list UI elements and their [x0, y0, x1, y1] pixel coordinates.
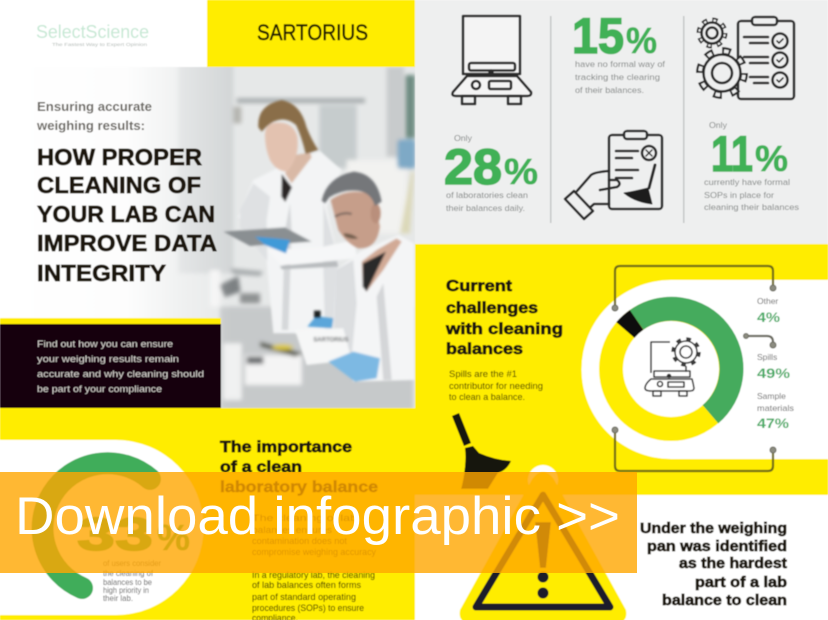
title: HOW PROPER	[37, 144, 202, 170]
legend: sample materials: Sample	[757, 391, 786, 401]
title	[37, 144, 217, 286]
body text: to clean a balance.	[449, 392, 525, 402]
callout text: part of a lab	[695, 575, 787, 591]
stat: 15 percent: %	[626, 20, 657, 61]
stat: percentage: %	[157, 517, 190, 558]
panel: logo header	[0, 0, 415, 67]
callout: compliance box: be part of your compliance	[37, 384, 162, 394]
callout text: balance to clean	[662, 593, 787, 609]
heading: challenges	[446, 300, 538, 317]
stat caption: their lab.	[103, 594, 133, 603]
body text: compromise weighing accuracy	[252, 547, 376, 557]
stat caption: high priority in	[103, 586, 149, 595]
title: YOUR LAB CAN	[37, 201, 215, 227]
heading	[445, 278, 563, 358]
photo: man scientist: SARTORIUS	[313, 338, 348, 344]
stat: 11 percent: 11	[711, 126, 753, 182]
body text: In a regulatory lab, the cleaning	[252, 570, 375, 580]
body text: part of standard operating	[252, 592, 356, 602]
stat: 28 percent: %	[504, 151, 538, 192]
callout text	[640, 521, 787, 609]
intro text	[36, 99, 152, 133]
body text: The cleaning of lab	[252, 513, 357, 523]
body text: of lab balances often forms	[252, 580, 361, 590]
photo: man scientist	[295, 172, 415, 382]
stat: 11 percent: SOPs in place for	[704, 190, 774, 200]
icon: hand with cleaning checklist	[565, 131, 662, 219]
photo: woman scientist	[223, 100, 357, 333]
callout text: pan was identified	[647, 539, 787, 555]
body text: balances ensures	[252, 525, 332, 535]
banner: download infographic: Download infographic >>	[15, 487, 620, 546]
stat: 28 percent: 28	[444, 139, 502, 195]
photo: lab background	[178, 63, 416, 410]
legend: sample materials	[757, 391, 794, 431]
logo: SelectScience: SelectScience	[36, 22, 149, 42]
stat: 15 percent: of their balances.	[575, 85, 644, 95]
white pill	[582, 280, 828, 459]
icon: balance with gear	[645, 340, 698, 396]
legend: sample materials: materials	[757, 403, 794, 413]
icon part: small gear	[700, 20, 724, 46]
panel: lab photo	[55, 66, 416, 409]
callout text: Under the weighing	[640, 521, 787, 537]
title: IMPROVE DATA	[37, 230, 217, 256]
legend: other: 4%	[757, 310, 780, 325]
icon part: gear	[674, 340, 698, 364]
legend: spills: Spills	[757, 352, 777, 362]
icon: warning triangle	[460, 465, 626, 620]
stat: 15 percent: tracking the clearing	[575, 72, 660, 82]
icon: gears and checklist	[700, 17, 794, 99]
heading: The importance	[220, 439, 352, 456]
body text	[449, 369, 543, 402]
callout: compliance box: Find out how you can ensure	[37, 339, 173, 349]
banner: download infographic	[0, 472, 637, 573]
panel: statistics	[415, 0, 828, 244]
stat: 11 percent: Only	[709, 120, 728, 130]
body text: contamination does not	[252, 536, 347, 546]
chart: progress arc	[43, 463, 150, 588]
callout: compliance box: your weighing results remain	[37, 354, 179, 364]
body text: procedures (SOPs) to ensure	[252, 603, 364, 613]
stat: 28 percent: Only	[454, 133, 473, 143]
callout text: as the hardest	[679, 556, 787, 572]
stat: 28 percent	[444, 133, 538, 213]
photo: white fade	[0, 67, 208, 318]
legend: spills	[757, 352, 790, 381]
stat: 28 percent: of laboratories clean	[446, 190, 528, 200]
stat: 15 percent: have no formal way of	[575, 59, 666, 69]
callout: compliance box	[0, 318, 221, 408]
stat: 15 percent: 15	[572, 8, 624, 64]
intro text: Ensuring accurate	[37, 99, 152, 114]
title: INTEGRITY	[37, 260, 166, 286]
stat: 11 percent: %	[755, 138, 788, 179]
heading	[220, 439, 378, 496]
body text: Spills are the #1	[449, 369, 517, 379]
stat: 11 percent	[704, 120, 799, 212]
stat caption	[103, 559, 161, 603]
logo tagline: The Fastest Way to Expert Opinion	[52, 42, 148, 47]
stat: 11 percent: cleaning their balances	[704, 202, 799, 212]
white pill	[0, 440, 203, 615]
intro text: weighing results:	[36, 118, 145, 133]
heading: of a clean	[220, 459, 302, 476]
stat caption: balances to be	[103, 578, 153, 587]
legend: spills: 49%	[757, 366, 790, 381]
body text: contributor for needing	[449, 381, 543, 391]
legend: sample materials: 47%	[757, 416, 789, 431]
chart connectors	[612, 266, 776, 471]
heading: laboratory balance	[220, 479, 378, 496]
stat: percentage	[77, 508, 190, 560]
panel: importance of a clean balance	[0, 408, 415, 620]
icon: balance	[452, 16, 531, 104]
title: CLEANING OF	[37, 172, 201, 198]
icon: broom	[452, 413, 511, 489]
heading: with cleaning	[445, 321, 563, 338]
stat: 15 percent	[572, 8, 666, 95]
logo: Sartorius: SARTORIUS	[257, 20, 368, 45]
callout: compliance box: accurate and why cleaning should	[37, 369, 204, 379]
panel: hardest part to clean	[415, 465, 828, 620]
heading: balances	[446, 341, 523, 358]
heading: Current	[446, 278, 512, 295]
stat: 28 percent: their balances daily.	[446, 203, 525, 213]
legend: other: Other	[757, 296, 778, 306]
stat caption: of users consider	[103, 559, 161, 568]
panel: current challenges	[415, 244, 828, 495]
body text	[252, 513, 376, 620]
stat: percentage: 33	[77, 508, 153, 560]
chart: donut	[611, 309, 731, 429]
stat caption: the cleaning of	[103, 569, 154, 578]
legend: other	[757, 296, 780, 325]
stat: 11 percent: currently have formal	[704, 177, 790, 187]
icon part: large gear	[700, 51, 744, 95]
